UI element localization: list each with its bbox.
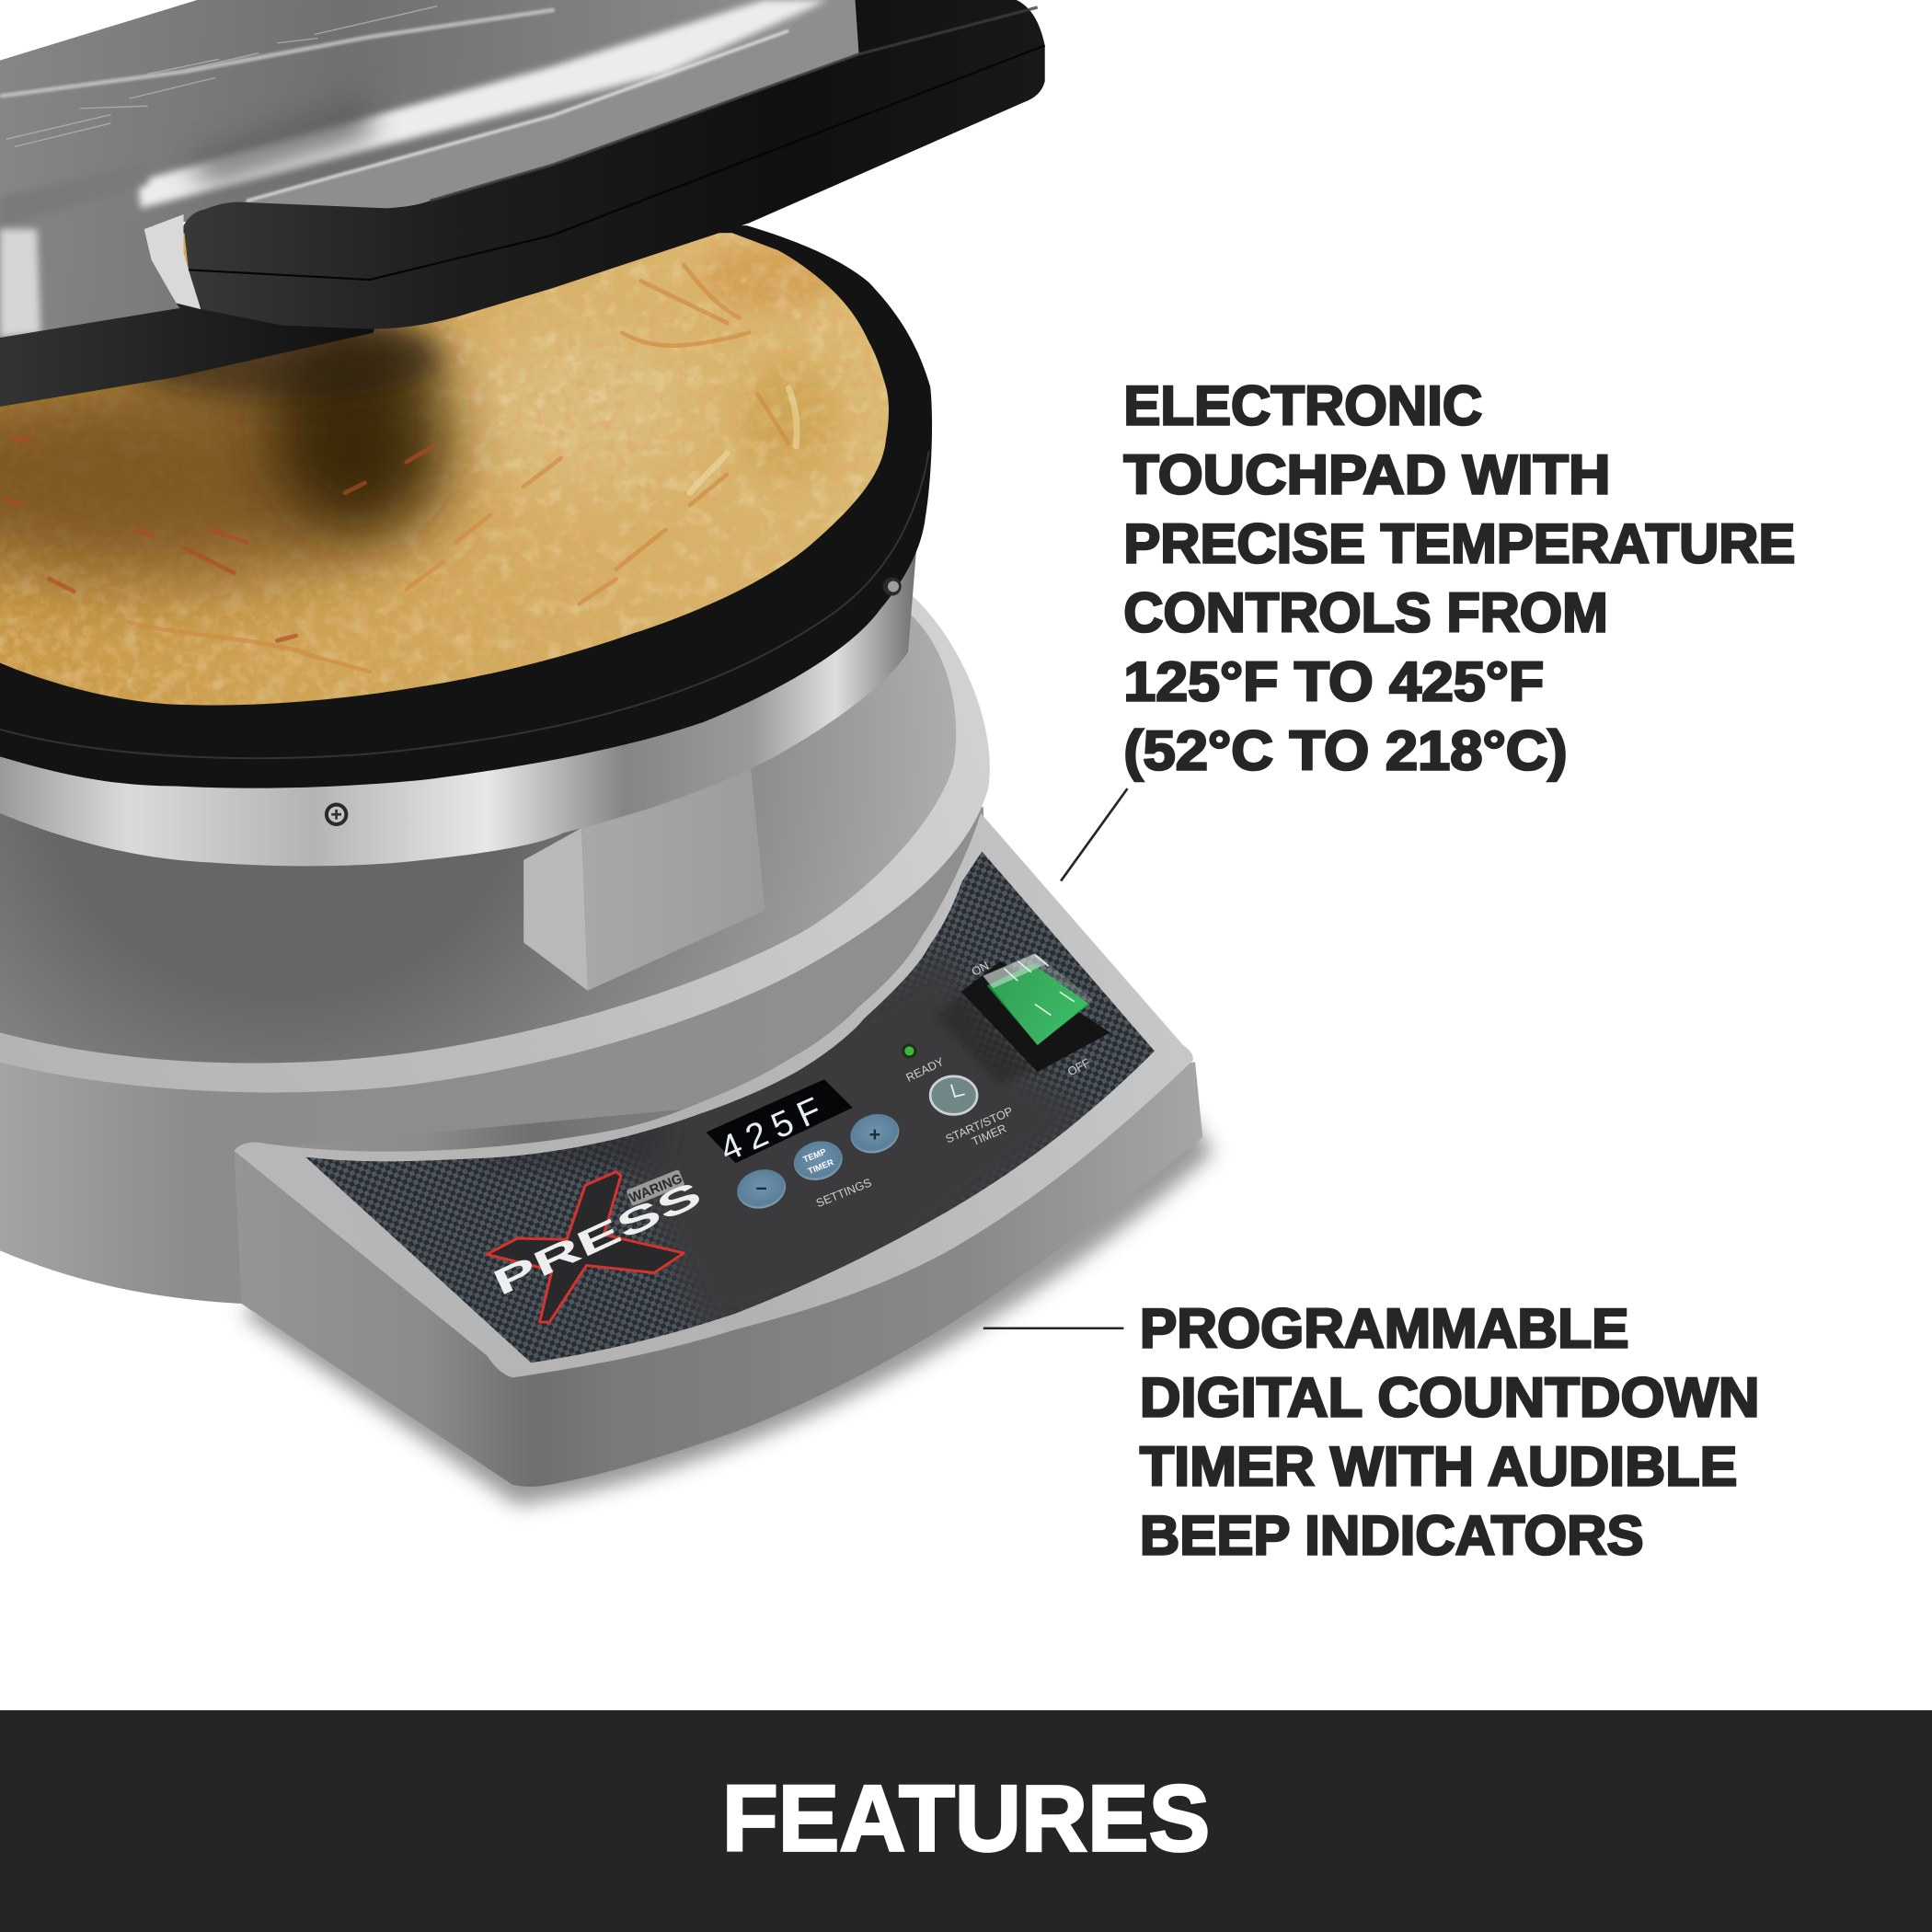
label: start stop timer: START/STOP — [943, 1104, 1015, 1145]
control housing top face — [234, 813, 1193, 1377]
callout text: countdown timer: TIMER WITH AUDIBLE — [1140, 1435, 1737, 1498]
digital display: 425F — [714, 1090, 827, 1169]
callout text: countdown timer: BEEP INDICATORS — [1140, 1504, 1644, 1567]
lid handle — [144, 0, 1045, 329]
pedestal top surface — [0, 610, 956, 1064]
button: minus — [732, 1164, 790, 1213]
logo: red X — [487, 1172, 684, 1322]
logo: WARING badge: WARING — [627, 1172, 684, 1206]
base shadow — [241, 1109, 1213, 1506]
screw: front — [325, 803, 348, 826]
lower body cylinder — [0, 788, 985, 1304]
lid gray lip — [247, 0, 858, 215]
control panel — [305, 851, 1155, 1363]
callout text: touchpad and temperature — [1123, 374, 1795, 781]
brushed metal band — [0, 530, 918, 866]
callout text: touchpad and temperature: PRECISE TEMPERATURE — [1123, 512, 1795, 574]
callout text: touchpad and temperature: ELECTRONIC — [1123, 374, 1482, 436]
button: temp timer: TIMER — [807, 1157, 835, 1176]
label: on: ON — [969, 959, 991, 979]
label: ready: READY — [903, 1054, 947, 1085]
digital display — [706, 1079, 853, 1169]
pedestal rim — [0, 595, 990, 1092]
callout text: countdown timer: PROGRAMMABLE — [1140, 1297, 1629, 1360]
button: plus — [846, 1109, 903, 1158]
ready LED — [902, 1043, 916, 1058]
callout text: touchpad and temperature: TOUCHPAD WITH — [1123, 443, 1610, 505]
callout text: countdown timer: DIGITAL COUNTDOWN — [1140, 1366, 1759, 1429]
control housing front face — [234, 1062, 1202, 1487]
crepe — [0, 222, 900, 715]
handle end cap — [144, 214, 201, 309]
screw: side — [883, 577, 902, 596]
black cooking plate ring — [0, 225, 932, 788]
label: settings: SETTINGS — [814, 1175, 873, 1210]
footer band with title — [0, 1710, 1932, 1932]
lid underside rim — [0, 295, 382, 407]
brushed steel lid — [0, 0, 858, 338]
product: crepe maker — [0, 0, 1213, 1506]
button: clock timer — [930, 1076, 977, 1114]
callout text: touchpad and temperature: 125°F TO 425°F — [1123, 650, 1544, 712]
callout text: touchpad and temperature: CONTROLS FROM — [1123, 581, 1608, 643]
label: off: OFF — [1065, 1055, 1092, 1078]
leader line: countdown timer — [983, 1328, 1123, 1329]
support block — [523, 752, 765, 991]
button: temp timer: TEMP — [802, 1147, 827, 1165]
callout text: touchpad and temperature: (52°C TO 218°C) — [1123, 719, 1568, 781]
plate seam highlight — [0, 451, 929, 758]
callout text: countdown timer — [1140, 1297, 1759, 1567]
label: start stop timer: TIMER — [970, 1121, 1008, 1148]
title: FEATURES — [722, 1766, 1210, 1871]
logo: PRESS: PRESS — [488, 1174, 707, 1304]
button: temp timer — [789, 1136, 847, 1186]
leader line: temperature controls — [1061, 788, 1127, 881]
rocker switch — [937, 954, 1110, 1085]
button: minus: − — [755, 1178, 767, 1200]
button: plus: + — [869, 1123, 880, 1145]
